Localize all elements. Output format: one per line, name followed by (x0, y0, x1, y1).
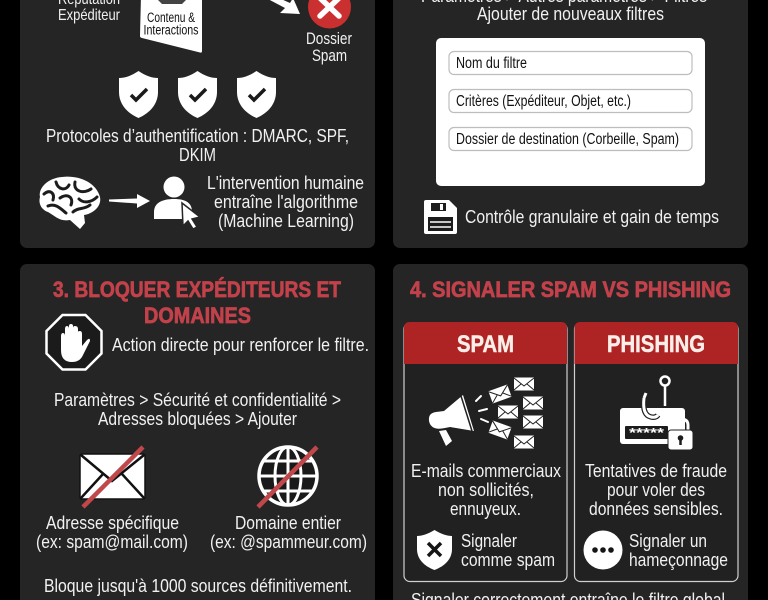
icon: cerveau (39, 177, 100, 229)
label: domaine entier (210, 512, 367, 552)
text: signaler un hameçonnage: hameçonnage (629, 549, 728, 570)
champ: critères (449, 90, 692, 112)
champ: nom du filtre (449, 52, 692, 74)
icon: hameçon, carte et cadenas: ***** (629, 425, 665, 440)
text: intervention humaine: entraîne l'algorithme (214, 191, 358, 212)
heading: signaler spam vs phishing: 4. SIGNALER SPAM VS PHISHING (410, 277, 731, 302)
label: domaine entier: Domaine entier (235, 512, 341, 533)
text: signaler un hameçonnage: Signaler un (629, 530, 707, 551)
text: signaler comme spam (461, 530, 555, 570)
icon: document contenu et interactions: Interactions (144, 22, 199, 38)
text: chemin adresses bloquées: Adresses bloquées > Ajouter (98, 408, 297, 429)
champ: dossier de destination: Dossier de destination (Corbeille, Spam) (456, 131, 679, 148)
label: réputation expéditeur (58, 0, 121, 24)
text: signaler comme spam: comme spam (461, 549, 555, 570)
text: intervention humaine (207, 172, 364, 231)
heading: bloquer expéditeurs: 3. BLOQUER EXPÉDITEURS ET (53, 277, 341, 302)
heading: bloquer expéditeurs (53, 277, 341, 328)
panel: signaler spam vs phishing (393, 264, 748, 600)
text: signaler comme spam: Signaler (461, 530, 517, 551)
icon: document contenu et interactions: Contenu & (147, 10, 195, 25)
icon: dossier spam rouge (308, 0, 351, 28)
text: chemin adresses bloquées (54, 389, 341, 429)
label: domaine entier: (ex: @spammeur.com) (210, 531, 367, 552)
text: chemin des paramètres: Ajouter de nouveaux filtres (477, 3, 664, 24)
label: adresse spécifique: (ex: spam@mail.com) (36, 531, 188, 552)
label: adresse spécifique (36, 512, 188, 552)
text: contrôle granulaire: Contrôle granulaire et gain de temps (465, 206, 719, 227)
text: intervention humaine: L'intervention humaine (207, 172, 364, 193)
icon: bouclier croix (417, 530, 452, 570)
text: chemin des paramètres (421, 0, 707, 24)
text: protocoles d'authentification: Protocoles d’authentification : DMARC, SPF, (46, 125, 349, 146)
text: définition spam: non sollicités, (438, 479, 534, 500)
en-tête: spam: SPAM (457, 331, 514, 358)
champ: critères: Critères (Expéditeur, Objet, etc.) (456, 93, 631, 110)
icon: disquette (424, 200, 457, 234)
label: dossier spam (306, 30, 352, 65)
text: définition phishing: données sensibles. (589, 498, 723, 519)
text: protocoles d'authentification: DKIM (179, 144, 216, 165)
text: définition phishing: pour voler des (607, 479, 705, 500)
panel: bloquer expéditeurs et domaines (20, 264, 375, 600)
carte: spam (404, 322, 567, 582)
arrow: vers dossier spam (266, 0, 300, 14)
icon: utilisateur avec curseur (154, 176, 200, 229)
text: définition phishing (585, 460, 727, 519)
champ: dossier de destination (449, 128, 692, 150)
icon: cercle trois points (584, 530, 622, 570)
text: définition phishing: Tentatives de fraude (585, 460, 727, 481)
icon: main stop octogone (46, 315, 102, 370)
arrow: cerveau vers utilisateur (109, 194, 150, 208)
label: dossier spam: Spam (312, 47, 347, 65)
text: limite de blocage: Bloque jusqu'à 1000 sources définitivement. (44, 575, 352, 596)
icon: globe barré (258, 447, 317, 507)
en-tête: phishing (574, 322, 738, 364)
en-tête: spam (404, 322, 567, 364)
text: intervention humaine: (Machine Learning) (218, 210, 354, 231)
label: dossier spam: Dossier (306, 30, 352, 48)
label: réputation expéditeur: Expéditeur (58, 7, 121, 24)
formulaire de filtre (436, 38, 705, 186)
icon: document contenu et interactions (140, 0, 202, 53)
icons: trois boucliers validés (119, 71, 276, 118)
champ: nom du filtre: Nom du filtre (456, 55, 527, 72)
en-tête: phishing: PHISHING (607, 331, 705, 358)
text: définition spam: ennuyeux. (450, 498, 521, 519)
heading: bloquer expéditeurs: DOMAINES (144, 303, 251, 328)
icon: enveloppes (488, 377, 544, 449)
text: protocoles d'authentification (46, 125, 349, 165)
text: chemin adresses bloquées: Paramètres > Sécurité et confidentialité > (54, 389, 341, 410)
icon: hameçon, carte et cadenas (620, 376, 693, 450)
carte: phishing (574, 322, 738, 582)
icon: mégaphone (429, 395, 488, 446)
panel: créer des filtres (393, 0, 748, 248)
icon: enveloppe barrée (80, 447, 145, 507)
text: définition spam (411, 460, 562, 519)
label: adresse spécifique: Adresse spécifique (46, 512, 179, 533)
text: signaler un hameçonnage (629, 530, 728, 570)
panel: comment fonctionne le filtre (20, 0, 375, 248)
text: définition spam: E-mails commerciaux (411, 460, 562, 481)
text: action directe: Action directe pour renforcer le filtre. (112, 334, 369, 355)
